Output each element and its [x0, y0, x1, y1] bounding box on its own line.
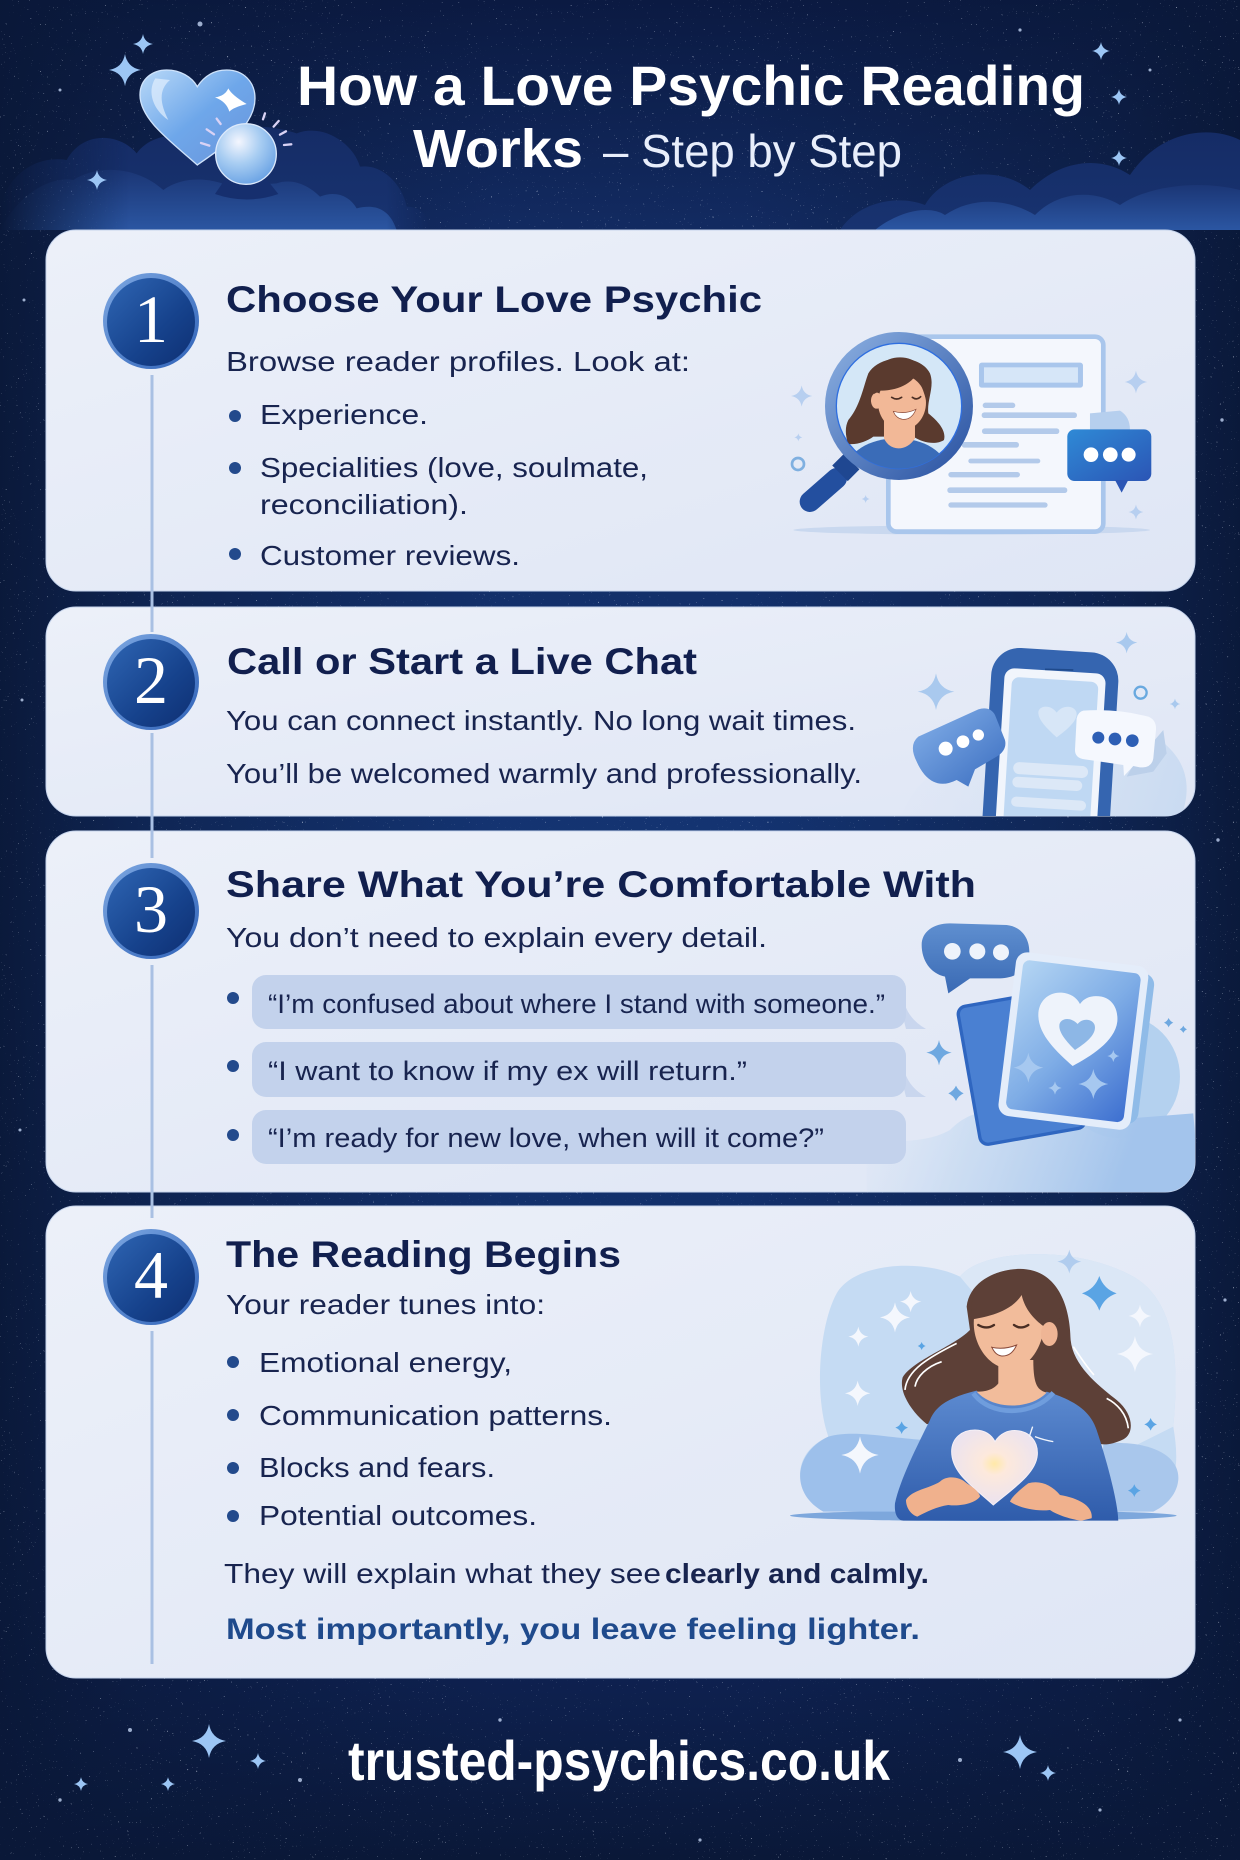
bangs — [971, 1270, 1063, 1326]
icon: glass heart — [140, 70, 255, 165]
step number 1: 1 — [134, 281, 168, 357]
bullet list: reconciliation). — [260, 489, 468, 520]
bullet list: Communication patterns. — [259, 1400, 612, 1431]
step number 1 — [103, 273, 199, 369]
bullet list: Customer reviews. — [260, 540, 520, 571]
footer website: trusted-psychics.co.uk — [348, 1729, 891, 1792]
step number 2 — [103, 634, 199, 730]
quote: confused — [227, 975, 926, 1029]
panel: step 2 — [46, 606, 1196, 816]
icon: crystal ball base — [215, 179, 278, 199]
intro text: Browse reader profiles. Look at: — [226, 346, 690, 377]
face — [974, 1293, 1045, 1369]
text line 2: You’ll be welcomed warmly and professionally. — [226, 758, 862, 789]
header sparkles — [87, 34, 1127, 190]
bullet list: Potential outcomes. — [259, 1500, 537, 1531]
bullet list: Experience. — [260, 399, 428, 430]
quote: ex: “I want to know if my ex will return.” — [268, 1056, 747, 1086]
quote: new love — [227, 1110, 906, 1164]
glowing heart — [952, 1430, 1037, 1505]
footer sparkles — [74, 1724, 1056, 1791]
panel: step 4 — [46, 1206, 1195, 1678]
title — [297, 54, 1085, 179]
header clouds: right — [840, 132, 1240, 230]
text line 1: You can connect instantly. No long wait times. — [226, 705, 856, 736]
header clouds: left — [0, 127, 430, 230]
sparkle rays — [201, 113, 291, 146]
heading: Share What You’re Comfortable With — [226, 864, 976, 905]
quote: new love: “I’m ready for new love, when will it come?” — [268, 1123, 824, 1153]
heading: The Reading Begins — [226, 1234, 621, 1275]
closing sentence: clearly and calmly. — [665, 1558, 929, 1589]
step number 4 — [103, 1229, 199, 1325]
illustration: smiling woman holding a heart — [790, 1250, 1178, 1521]
neck — [977, 1360, 1047, 1406]
card background — [46, 831, 1195, 1192]
illustration: magnifier over profile — [791, 332, 1151, 535]
timeline connector — [150, 375, 154, 1664]
bullet list — [229, 399, 648, 571]
title: – Step by Step — [603, 125, 902, 177]
bullet list: Blocks and fears. — [259, 1452, 495, 1483]
panel: step 1 — [46, 230, 1195, 591]
step number 2: 2 — [134, 642, 168, 718]
closing sentence — [224, 1558, 929, 1589]
heading: Choose Your Love Psychic — [226, 279, 762, 320]
closing sentence: They will explain what they see — [224, 1558, 661, 1589]
heading: Call or Start a Live Chat — [227, 641, 697, 682]
card background — [46, 1206, 1195, 1678]
blue aura — [800, 1254, 1176, 1510]
highlight sentence: Most importantly, you leave feeling lighter. — [226, 1613, 920, 1646]
icon: heart and crystal ball — [140, 70, 291, 199]
bullet list — [227, 1347, 612, 1531]
title: How a Love Psychic Reading — [297, 54, 1085, 117]
bullet list: Specialities (love, soulmate, — [260, 452, 648, 483]
bullet list: Emotional energy, — [259, 1347, 512, 1378]
hands — [906, 1477, 980, 1517]
step number 4: 4 — [134, 1237, 168, 1313]
step number 3: 3 — [134, 871, 168, 947]
title: Works — [413, 119, 583, 179]
card background — [46, 230, 1195, 591]
panel: step 3 — [46, 831, 1200, 1197]
illustration: oracle cards with chat bubble — [867, 923, 1200, 1197]
sweater — [895, 1391, 1118, 1521]
icon: crystal ball — [216, 124, 276, 184]
intro text: Your reader tunes into: — [226, 1289, 545, 1320]
quote: ex — [227, 1042, 926, 1097]
step number 3 — [103, 863, 199, 959]
card background — [46, 607, 1195, 816]
hair — [902, 1269, 1131, 1444]
quote: confused: “I’m confused about where I stand with someone.” — [268, 989, 885, 1019]
illustration: phone with chat bubbles — [912, 632, 1186, 816]
intro text: You don’t need to explain every detail. — [226, 922, 767, 953]
